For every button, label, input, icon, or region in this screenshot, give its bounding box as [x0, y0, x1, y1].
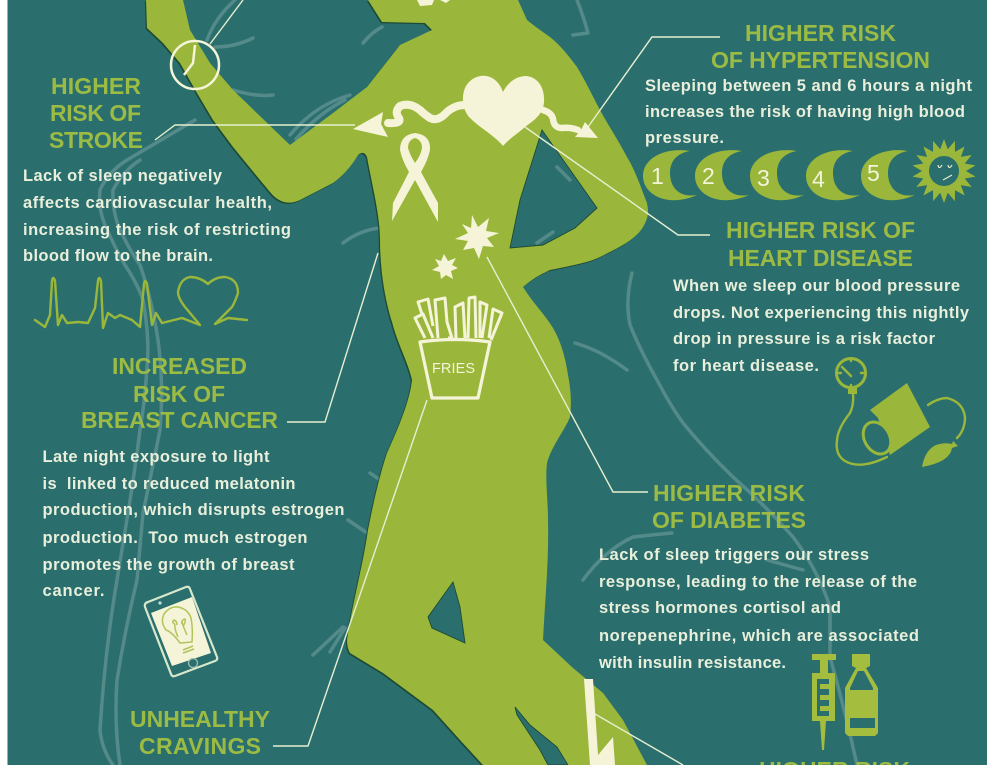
icon: tired sun: [912, 139, 976, 203]
heading: breast cancer: INCREASED: [112, 353, 247, 379]
lightning bolt: [584, 679, 615, 765]
text: diabetes: stress hormones cortisol and: [599, 599, 841, 617]
icon: ribbon: [392, 133, 438, 222]
text: breast cancer: [42, 448, 344, 600]
inner veins over gap: [537, 167, 570, 243]
icon: five moons: 4: [812, 166, 825, 192]
text: heart disease: [673, 277, 970, 375]
text: heart disease: When we sleep our blood pressure: [673, 277, 960, 295]
text: diabetes: response, leading to the release of the: [599, 573, 917, 591]
icon: five moons: 1: [651, 163, 664, 189]
text: breast cancer: promotes the growth of breast: [42, 556, 295, 574]
heading: unhealthy cravings: [130, 706, 270, 759]
icon: five moons: 2: [702, 163, 715, 189]
heading: breast cancer: [81, 353, 278, 433]
text: hypertension: pressure.: [645, 129, 724, 147]
heading: hypertension: OF HYPERTENSION: [711, 47, 930, 73]
icon: five moons: 5: [867, 160, 880, 186]
heading: diabetes: OF DIABETES: [652, 507, 806, 533]
heading: stroke: RISK OF: [50, 100, 141, 126]
text: breast cancer: production, which disrupts estrogen: [42, 501, 344, 519]
icon: five moons: [643, 150, 915, 200]
text: breast cancer: production. Too much estrogen: [42, 529, 308, 547]
text: hypertension: increases the risk of having high blood: [645, 103, 965, 121]
heading: stroke: [49, 73, 143, 153]
icon: fries: FRIES: [432, 361, 475, 377]
heading: breast cancer: RISK OF: [133, 381, 225, 407]
heading: unhealthy cravings: CRAVINGS: [139, 733, 261, 759]
heading: stroke: HIGHER: [51, 73, 141, 99]
icon: insulin bottle: [845, 654, 878, 736]
icon: heartbeat line: [35, 277, 247, 328]
text: hypertension: [645, 77, 972, 147]
heading: heart disease: [726, 217, 915, 271]
text: breast cancer: is linked to reduced melatonin: [42, 475, 296, 493]
text: hypertension: Sleeping between 5 and 6 hours a night: [645, 77, 972, 95]
text: stroke: Lack of sleep negatively: [23, 167, 223, 185]
heading: heart disease: HEART DISEASE: [728, 245, 913, 271]
heading: heart disease: HIGHER RISK OF: [726, 217, 915, 243]
text: breast cancer: Late night exposure to light: [42, 448, 270, 466]
heading: unhealthy cravings: UNHEALTHY: [130, 706, 270, 732]
heading: diabetes: HIGHER RISK: [653, 480, 805, 506]
icon: phone with light bulb: [145, 587, 217, 676]
icon: stress bursts: [432, 215, 499, 279]
heading: diabetes: [652, 480, 806, 533]
heading: hypertension: HIGHER RISK: [745, 20, 896, 46]
text: diabetes: [598, 546, 919, 672]
icon: fries: [415, 297, 502, 398]
text: diabetes: with insulin resistance.: [598, 654, 786, 672]
woman silhouette: [146, 0, 648, 765]
icon: blood pressure cuff: [836, 358, 965, 467]
silhouette dark edge: [145, 1, 647, 765]
icon: syringe: [812, 654, 836, 750]
background veins: [100, 0, 857, 765]
text: diabetes: norepenephrine, which are associated: [599, 627, 919, 645]
heading: breast cancer: BREAST CANCER: [81, 407, 278, 433]
text: heart disease: drop in pressure is a risk factor: [673, 330, 936, 348]
text: stroke: affects cardiovascular health,: [23, 194, 272, 212]
text: breast cancer: cancer.: [42, 582, 104, 600]
icon: heart with arteries: [353, 76, 598, 146]
text: heart disease: for heart disease.: [673, 357, 819, 375]
text: stroke: blood flow to the brain.: [23, 247, 213, 265]
heading: hypertension: [711, 20, 930, 73]
icon: five moons: 3: [757, 165, 770, 191]
gaps in silhouette: [428, 130, 597, 765]
text: heart disease: drops. Not experiencing this nightly: [673, 304, 970, 322]
heading: stroke: STROKE: [49, 127, 143, 153]
top cream shape: [417, 0, 450, 6]
text: diabetes: Lack of sleep triggers our stress: [599, 546, 869, 564]
text: stroke: [23, 167, 291, 265]
icon: clock: [171, 41, 219, 89]
text: stroke: increasing the risk of restricting: [23, 221, 291, 239]
connector lines: [155, 0, 720, 765]
